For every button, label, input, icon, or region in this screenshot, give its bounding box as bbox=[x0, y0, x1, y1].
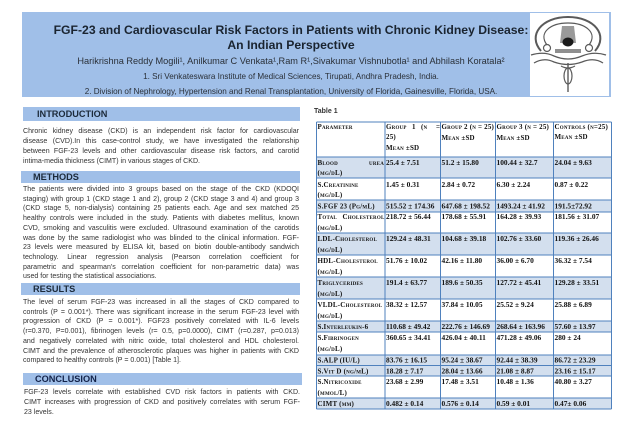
row: HDL cholesterol bbox=[318, 256, 592, 276]
row: HDL cholesterol: 36.00 ± 6.70 bbox=[496, 256, 534, 265]
row: vitamin D bbox=[318, 366, 596, 376]
row: LDL cholesterol: (mg/dL) bbox=[318, 246, 343, 254]
text block: results: and negatively correlated with nitric oxide, total cholesterol and HDL cholesterol. bbox=[23, 338, 299, 345]
row: creatinine: 2.84 ± 0.72 bbox=[442, 180, 475, 189]
row: ALP: 95.24 ± 38.67 bbox=[442, 356, 483, 364]
text block: methods: (CKD stage 5, non-dialysis) containing 25 patients each. Age and sex matched 25 bbox=[23, 205, 299, 212]
text block: introduction: Chronic kidney disease (CKD) is an independent risk factor for cardiovascular bbox=[23, 128, 299, 135]
authors: Harikrishna Reddy Mogili¹, Anilkumar C Venkata¹,Ram R¹,Sivakumar Vishnubotla¹ and Abhilash Koratala² bbox=[77, 56, 505, 66]
row: HDL cholesterol: (mg/dL) bbox=[318, 268, 343, 276]
text block: methods: 23 levels were measured by ELISA kit, based on biotin double-antibody sandwich bbox=[23, 244, 299, 251]
row: ALP: 86.72 ± 23.29 bbox=[554, 356, 596, 364]
row: blood urea: 24.04 ± 9.63 bbox=[554, 158, 592, 167]
text block: methods bbox=[23, 186, 299, 280]
row: fibrinogen: 426.04 ± 40.11 bbox=[442, 333, 486, 342]
row: total cholesterol: Cholesterol bbox=[342, 213, 385, 221]
row: interleukin-6: 268.64 ± 163.96 bbox=[496, 322, 545, 331]
row: fibrinogen bbox=[318, 333, 581, 353]
text block: introduction bbox=[23, 128, 299, 164]
table header row: Mean ±SD bbox=[554, 133, 588, 141]
row: triglycerides: Triglycerides bbox=[318, 279, 363, 287]
row: VLDL cholesterol: 25.88 ± 6.89 bbox=[554, 300, 592, 309]
row: vitamin D: 21.08 ± 8.87 bbox=[496, 366, 534, 376]
affiliation 1: 1. Sri Venkateswara Institute of Medical Sciences, Tirupati, Andhra Pradesh, India. bbox=[143, 72, 439, 81]
row: creatinine: (mg/dL) bbox=[318, 191, 343, 199]
row: vitamin D: S.Vit D (ng/mL) bbox=[318, 368, 369, 376]
row: creatinine bbox=[318, 180, 588, 199]
table header row: Mean ±SD bbox=[386, 144, 419, 152]
row: ALP: 83.76 ± 16.15 bbox=[386, 356, 427, 364]
row: triglycerides bbox=[318, 278, 600, 298]
text block: introduction: disease (CVD).In this case-control study, we have investigated the relationship bbox=[23, 138, 299, 145]
row: HDL cholesterol: 51.76 ± 10.02 bbox=[386, 256, 427, 265]
row: VLDL cholesterol: (mg/dL) bbox=[318, 312, 343, 320]
row: CIMT: CIMT (mm) bbox=[318, 400, 355, 408]
text block: methods: The patients were divided into 3 groups based on the stage of the CKD (KDOQI bbox=[23, 186, 299, 193]
heading: methods bbox=[21, 171, 300, 183]
row: VLDL cholesterol: 37.84 ± 10.05 bbox=[442, 300, 483, 309]
heading: results bbox=[21, 283, 300, 295]
row: creatinine: 1.45 ± 0.31 bbox=[386, 180, 420, 189]
row: triglycerides: 129.28 ± 33.51 bbox=[554, 278, 600, 287]
row: total cholesterol: 218.72 ± 56.44 bbox=[386, 212, 431, 221]
row: vitamin D: 28.04 ± 13.66 bbox=[442, 366, 483, 376]
affiliation 2: 2. Division of Nephrology, Hypertension and Renal Transplantation, University of Florida, Gainesville, Florida, USA. bbox=[85, 87, 497, 96]
row: nitric oxide: 10.48 ± 1.36 bbox=[496, 377, 534, 386]
row: LDL cholesterol bbox=[318, 234, 599, 254]
row: HDL cholesterol: 36.32 ± 7.54 bbox=[554, 256, 592, 265]
table header row: (n bbox=[421, 123, 428, 131]
table header row: Group 3 (n = 25) bbox=[496, 123, 550, 131]
row: HDL cholesterol: HDL-Cholesterol bbox=[318, 257, 378, 265]
table header row: 25) bbox=[386, 133, 396, 141]
text block: methods: healthy controls were included in the study. Patients with diabetes mellitus, known bbox=[23, 215, 299, 222]
row: blood urea: 25.4 ± 7.51 bbox=[386, 158, 420, 167]
title: An Indian Perspective bbox=[227, 38, 355, 52]
row: total cholesterol: (mg/dL) bbox=[318, 224, 343, 232]
text block: results: The level of serum FGF-23 was increased in all the stages of CKD compared to bbox=[23, 299, 299, 306]
text block: conclusion: FGF-23 levels correlate with established CVD risk factors in patients with CKD. bbox=[24, 389, 300, 396]
row: total cholesterol: Total bbox=[318, 213, 337, 221]
table header row: 1 bbox=[412, 123, 416, 131]
row: VLDL cholesterol: 38.32 ± 12.57 bbox=[386, 300, 427, 309]
row: nitric oxide: 23.68 ± 2.99 bbox=[386, 377, 424, 386]
table header row: = bbox=[436, 123, 440, 131]
row: blood urea: urea bbox=[369, 159, 384, 167]
row: triglycerides: 127.72 ± 45.41 bbox=[496, 278, 542, 287]
row: LDL cholesterol: 119.36 ± 26.46 bbox=[554, 234, 599, 243]
text block: methods: used for testing the statistical associations. bbox=[23, 273, 157, 280]
row: fibrinogen: S.Fibrinogen bbox=[318, 334, 359, 342]
row: LDL cholesterol: 129.24 ± 48.31 bbox=[386, 234, 431, 243]
heading: conclusion: CONCLUSION bbox=[35, 374, 97, 384]
row: vitamin D: 18.28 ± 7.17 bbox=[386, 366, 424, 376]
row: LDL cholesterol: 102.76 ± 33.60 bbox=[496, 234, 542, 243]
row: fibrinogen: 360.65 ± 34.41 bbox=[386, 333, 431, 342]
row: blood urea bbox=[318, 158, 592, 177]
row: creatinine: 0.87 ± 0.22 bbox=[554, 180, 588, 189]
text block: results: controls (P = 0.001*). There was significant increase in the serum FGF-23 level with bbox=[23, 309, 299, 316]
text block: results: (r=0.370, P=0.001), fibrinogen levels (r= 0.5, p=0.0000), CIMT (r=0.287, p=0.013) bbox=[23, 328, 299, 335]
text block: conclusion bbox=[24, 388, 300, 416]
row: fibrinogen: 280 ± 24 bbox=[554, 333, 581, 342]
row: interleukin-6: 110.68 ± 49.42 bbox=[386, 322, 431, 331]
table header row: Mean ±SD bbox=[496, 134, 530, 142]
table label: Table 1 bbox=[314, 108, 338, 115]
row: triglycerides: 189.6 ± 50.35 bbox=[442, 278, 483, 287]
row: fibrinogen: 471.28 ± 49.06 bbox=[496, 333, 542, 342]
text block: results: compared to healthy controls (P = 0.001) [Table 1]. bbox=[23, 357, 181, 364]
row: total cholesterol bbox=[318, 212, 600, 232]
text block: methods: technology. Linear regression analysis (Pearson correlation coefficient for bbox=[23, 254, 299, 261]
logo: institute emblem bbox=[530, 13, 609, 96]
row: vitamin D: 23.16 ± 15.17 bbox=[554, 366, 596, 376]
row: nitric oxide: 17.48 ± 3.51 bbox=[442, 377, 479, 386]
title: FGF-23 and Cardiovascular Risk Factors in Patients with Chronic Kidney Disease: bbox=[54, 23, 528, 37]
row: nitric oxide bbox=[318, 377, 592, 397]
table header row bbox=[318, 123, 608, 152]
row: HDL cholesterol: 42.16 ± 11.80 bbox=[442, 256, 482, 265]
table header row: Group 2 (n = 25) bbox=[442, 123, 495, 131]
heading: introduction bbox=[23, 107, 300, 121]
text block: methods: staging) with group 1 (CKD stage 1 and 2), group 2 (CKD stage 3 and 4) and group 3 bbox=[23, 196, 299, 203]
title bbox=[54, 23, 528, 52]
row: FGF 23: 515.52 ± 174.36 bbox=[386, 202, 435, 210]
text block: methods: parametric and spearman's correlation coefficient for non-parametric data) was bbox=[23, 264, 299, 271]
row: nitric oxide: 40.80 ± 3.27 bbox=[554, 377, 592, 386]
row: interleukin-6: 222.76 ± 146.69 bbox=[442, 322, 490, 331]
row: nitric oxide: (µmol/L) bbox=[318, 389, 348, 397]
row: total cholesterol: 181.56 ± 31.07 bbox=[554, 212, 600, 221]
row: ALP: S.ALP (IU/L) bbox=[318, 356, 360, 364]
row: creatinine: 6.30 ± 2.24 bbox=[496, 180, 530, 189]
table header row: Group bbox=[386, 123, 407, 131]
header banner bbox=[22, 12, 611, 97]
row: triglycerides: 191.4 ± 63.77 bbox=[386, 278, 427, 287]
row: VLDL cholesterol: VLDL-Cholesterol bbox=[318, 301, 383, 309]
row: CIMT: 0.59 ± 0.01 bbox=[496, 399, 530, 408]
heading: conclusion bbox=[23, 373, 302, 385]
heading: methods: METHODS bbox=[33, 172, 79, 182]
table header row: Parameter bbox=[318, 123, 353, 131]
heading: introduction: INTRODUCTION bbox=[37, 109, 107, 119]
row: interleukin-6: S.Interleukin-6 bbox=[318, 323, 369, 331]
row: LDL cholesterol: LDL-Cholesterol bbox=[318, 235, 377, 243]
row: fibrinogen: (mg/dL) bbox=[318, 345, 343, 353]
row: nitric oxide: S.Nitricoxide bbox=[318, 378, 362, 386]
table header row: Controls (n=25) bbox=[554, 123, 608, 131]
text block: conclusion: CIMT increases with progression of CKD and positively correlates with serum FGF- bbox=[24, 399, 300, 406]
row: FGF 23: 647.68 ± 198.52 bbox=[442, 202, 490, 210]
text block: results: progression of CKD (P = 0.001*). FGF23 positively correlated with IL-6 levels bbox=[23, 318, 299, 325]
row: blood urea: 100.44 ± 32.7 bbox=[496, 158, 538, 167]
row: total cholesterol: 178.68 ± 55.91 bbox=[442, 212, 487, 221]
text block: methods: was done by the same radiologist who was blinded to the clinical information. FGF- bbox=[23, 234, 299, 242]
row: CIMT: 0.482 ± 0.14 bbox=[386, 399, 424, 408]
table header row: Mean ±SD bbox=[442, 134, 475, 142]
row: FGF 23: 191.5±72.92 bbox=[554, 202, 592, 210]
row: CIMT: 0.47± 0.06 bbox=[554, 399, 587, 408]
text block: introduction: intima-media thickness (CIMT) in various stages of CKD. bbox=[23, 158, 200, 164]
row: CIMT bbox=[318, 399, 587, 408]
text block: results: CIMT and the prevalence of atherosclerotic plaques was higher in patients with CKD bbox=[23, 348, 299, 354]
row: interleukin-6 bbox=[318, 322, 596, 331]
row: LDL cholesterol: 104.68 ± 39.18 bbox=[442, 234, 487, 243]
row: ALP bbox=[318, 356, 596, 364]
row: creatinine: S.Creatinine bbox=[318, 181, 359, 189]
row: FGF 23: S.FGF 23 (Pg/mL) bbox=[318, 202, 375, 210]
row: blood urea: (mg/dL) bbox=[318, 169, 343, 177]
row: ALP: 92.44 ± 38.39 bbox=[496, 356, 538, 364]
text block: conclusion: 23 levels. bbox=[24, 409, 54, 416]
heading: results: RESULTS bbox=[33, 284, 75, 294]
row: VLDL cholesterol bbox=[318, 300, 592, 320]
row: CIMT: 0.576 ± 0.14 bbox=[442, 399, 479, 408]
row: VLDL cholesterol: 25.52 ± 9.24 bbox=[496, 300, 534, 309]
row: triglycerides: (mg/dL) bbox=[318, 290, 343, 298]
row: blood urea: Blood bbox=[318, 159, 338, 167]
text block: methods: CVD, smoking and vasculitis were excluded. Ultrasound examination of the carotids bbox=[23, 225, 299, 232]
row: FGF 23 bbox=[318, 202, 592, 210]
row: total cholesterol: 164.28 ± 39.93 bbox=[496, 212, 542, 221]
text block: results bbox=[23, 298, 299, 364]
row: FGF 23: 1493.24 ± 41.92 bbox=[496, 202, 545, 210]
row: blood urea: 51.2 ± 15.80 bbox=[442, 158, 479, 167]
row: interleukin-6: 57.60 ± 13.97 bbox=[554, 322, 596, 331]
text block: introduction: between FGF-23 levels and other cardiovascular disease risk factors, and carotid bbox=[23, 148, 299, 154]
